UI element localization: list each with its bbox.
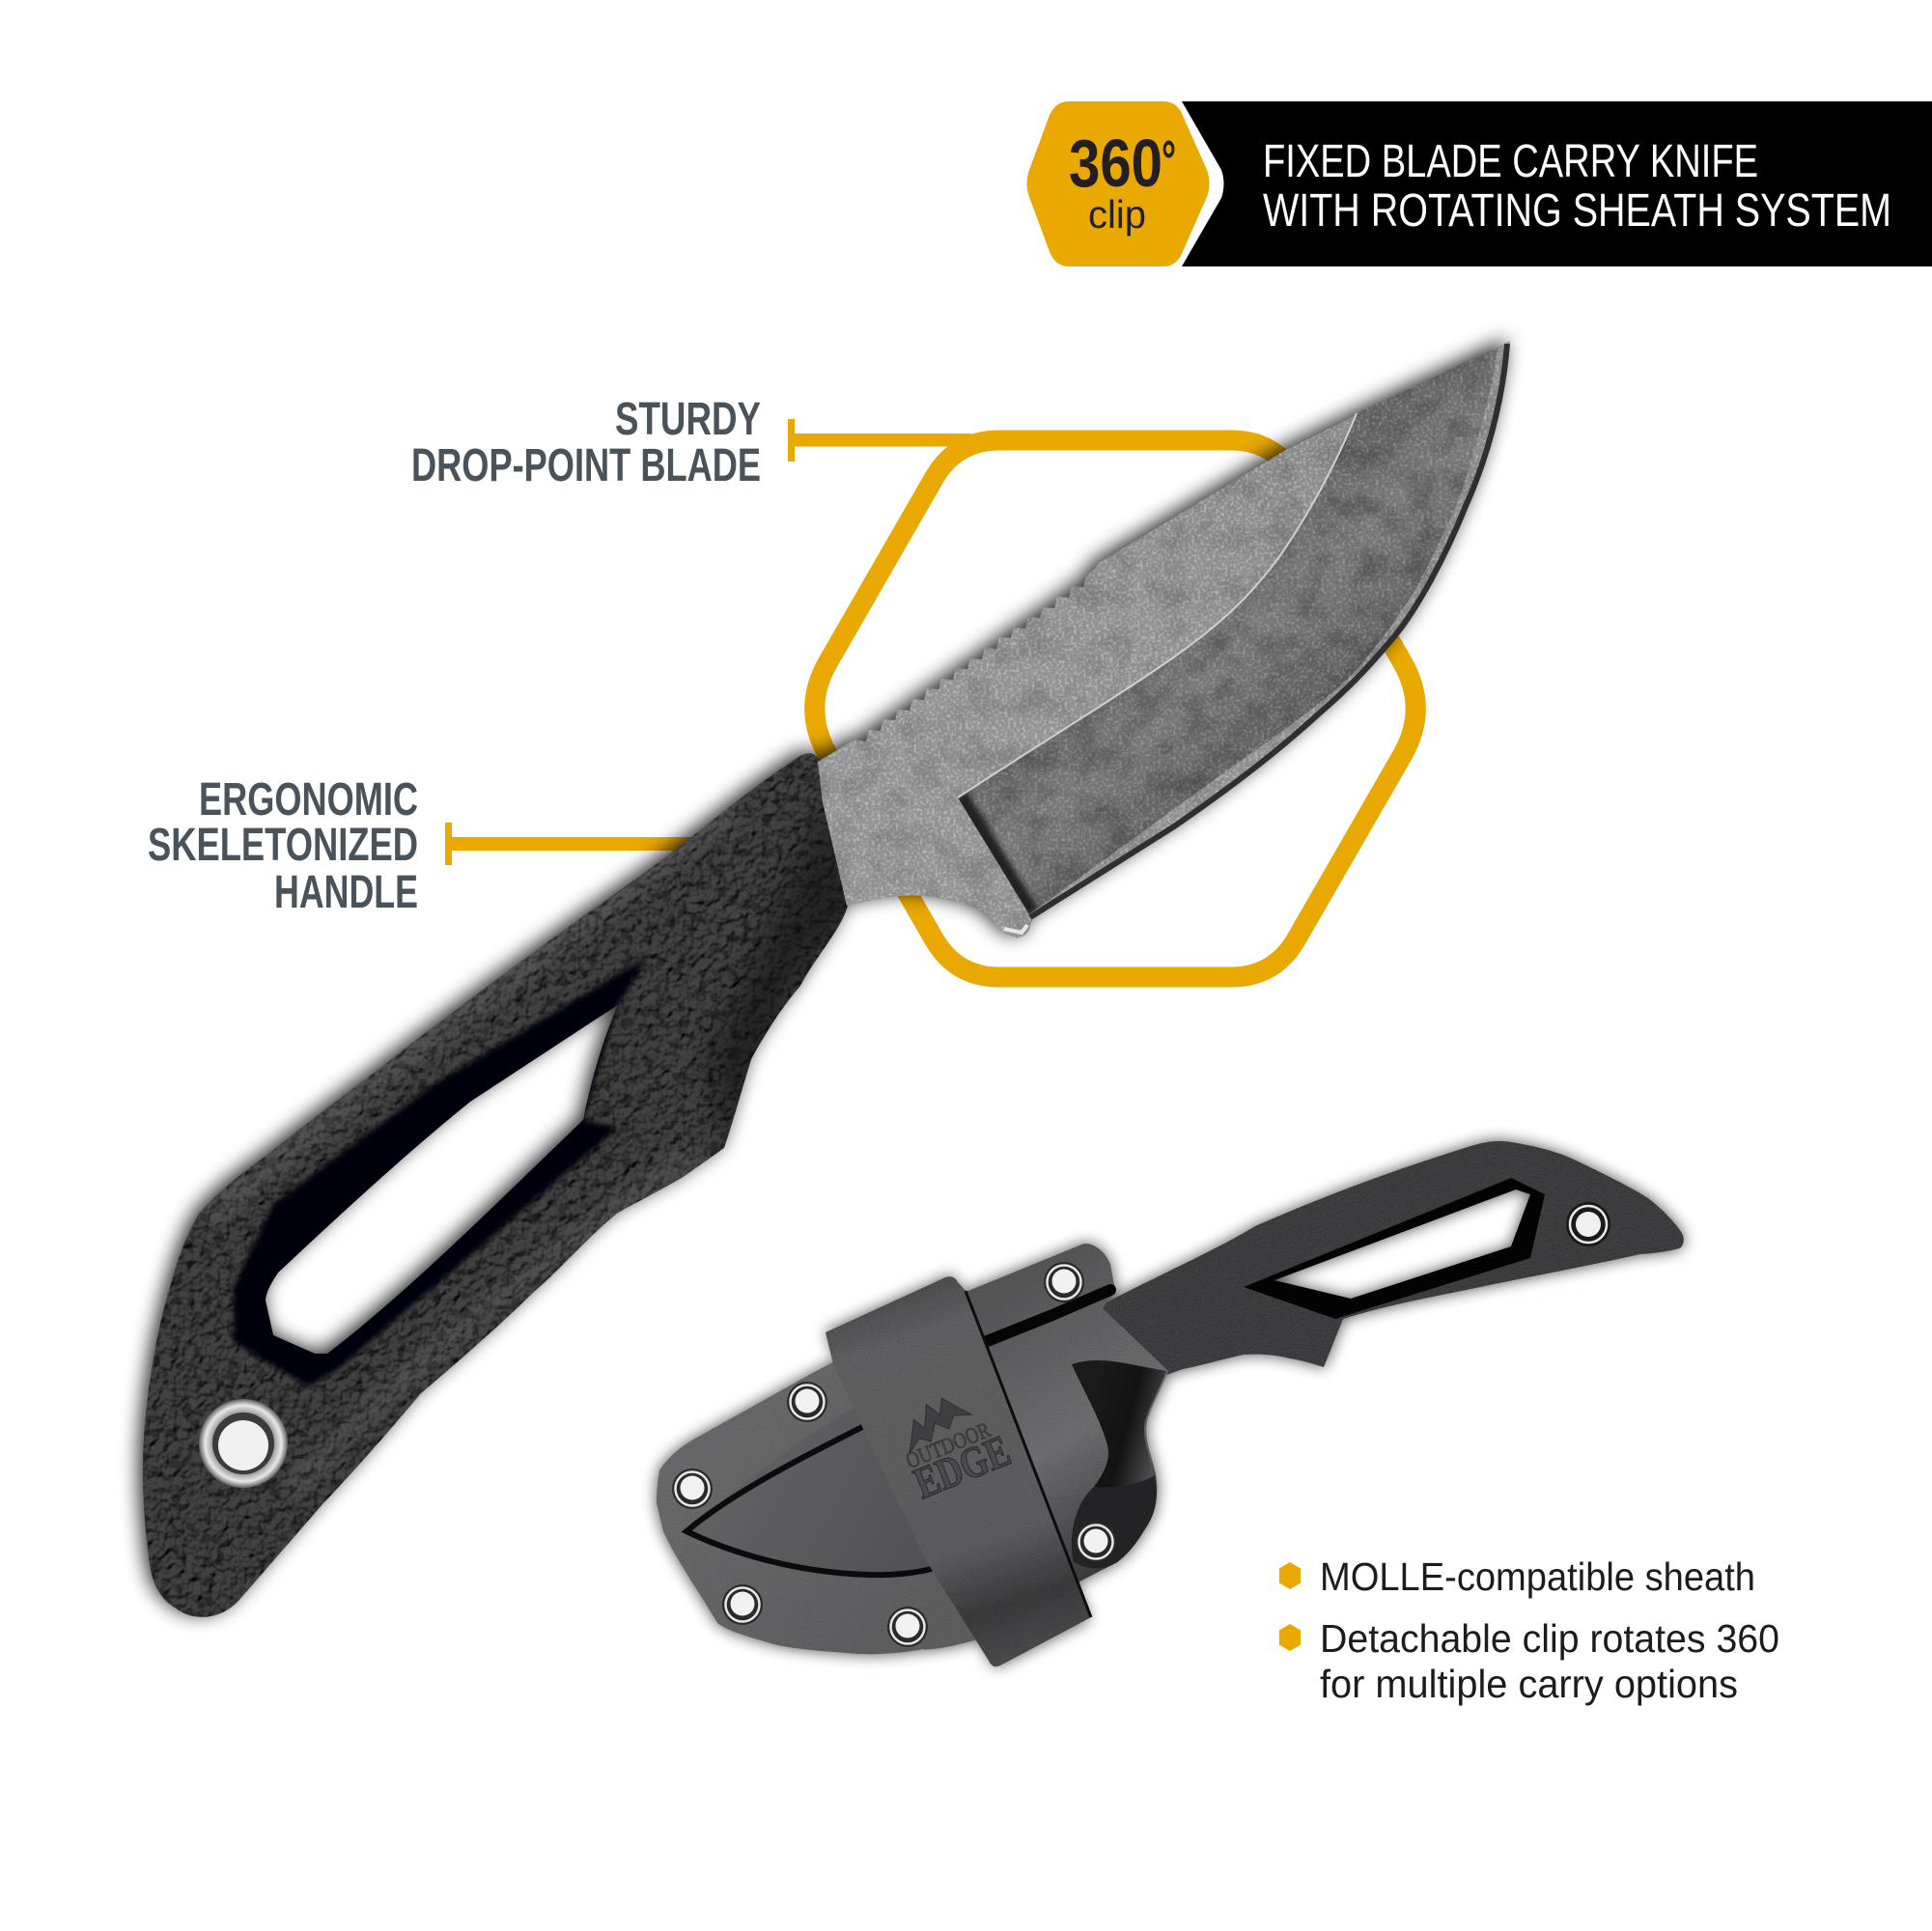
callout: sturdy drop-point blade: DROP-POINT BLADE (411, 440, 761, 491)
blade (811, 328, 1526, 946)
callout: ergonomic skeletonized handle: SKELETONIZED (148, 820, 418, 871)
thumb lever (1072, 1360, 1166, 1488)
sheath back section (927, 1244, 1168, 1622)
small knife in sheath (647, 1134, 1690, 1670)
sheath grommets (672, 1262, 1116, 1647)
handle with droplet texture (126, 734, 869, 1632)
callout: ergonomic skeletonized handle (148, 774, 696, 918)
outdoor edge logo: EDGE (908, 1425, 1017, 1508)
bullet 1 text: MOLLE-compatible sheath (1320, 1554, 1755, 1599)
sheath groove (985, 1290, 1110, 1342)
choil highlight (1004, 925, 1027, 933)
callout: ergonomic skeletonized handle: HANDLE (274, 867, 418, 918)
infographic canvas (124, 101, 1932, 1705)
header badge: 360 clip hexagon: 360 (1069, 126, 1162, 201)
header banner (1182, 101, 1932, 266)
callout: ergonomic skeletonized handle: ERGONOMIC (199, 774, 418, 826)
header banner: FIXED BLADE CARRY KNIFE (1263, 136, 1758, 187)
logo mountains (895, 1390, 976, 1453)
bullet 1 (1279, 1562, 1301, 1589)
outdoor edge logo: OUTDOOR (903, 1417, 994, 1473)
grind ridge highlight (958, 413, 1357, 798)
bullet 2 text: for multiple carry options (1320, 1662, 1738, 1706)
sheath body (647, 1236, 1178, 1661)
header badge: 360 clip hexagon: ° (1162, 129, 1176, 192)
bullet 2 (1279, 1624, 1301, 1651)
belt clip (821, 1270, 1096, 1670)
lever base (1072, 1475, 1157, 1568)
callout: sturdy drop-point blade (411, 394, 971, 491)
bullet 2 text (1320, 1616, 1779, 1706)
blade pocket (686, 1371, 966, 1575)
feature list (1279, 1554, 1779, 1706)
cutting edge dark strip (1030, 344, 1507, 917)
grommet: small handle (1566, 1202, 1610, 1246)
grommet: large handle (199, 1399, 288, 1488)
large knife (126, 328, 1526, 1632)
header badge: 360 clip hexagon: clip (1088, 192, 1146, 237)
drop shadow: sheath and knife (657, 1141, 1684, 1667)
header badge: 360 clip hexagon (1027, 101, 1209, 266)
callout: sturdy drop-point blade: STURDY (615, 394, 761, 445)
hollow grind bevel (958, 348, 1498, 914)
drop shadow: large knife (139, 338, 1506, 1614)
gold hexagon outline behind blade (815, 440, 1415, 977)
outdoor edge logo (890, 1383, 1017, 1508)
small handle (1091, 1134, 1690, 1381)
bullet 2 text: Detachable clip rotates 360 (1320, 1616, 1779, 1661)
